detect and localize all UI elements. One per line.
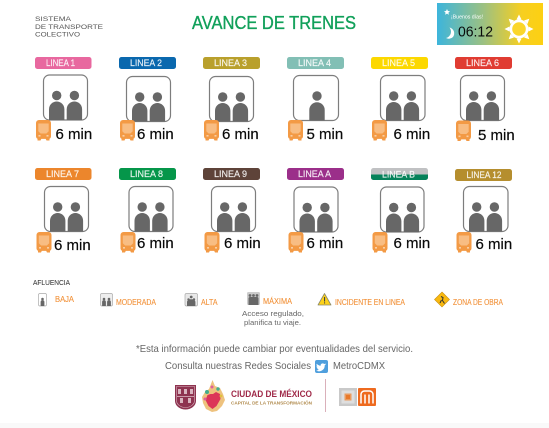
legend: maxima: MÁXIMA bbox=[263, 296, 292, 306]
legend heading: AFLUENCIA bbox=[33, 278, 70, 287]
panel: linea 1 bbox=[35, 57, 92, 143]
logo: metro bbox=[339, 388, 376, 406]
greeting card bbox=[437, 3, 543, 45]
organisation name: COLECTIVO bbox=[35, 32, 80, 38]
logo: shield bbox=[175, 385, 196, 410]
panel: linea 9 bbox=[203, 168, 261, 252]
panel: linea 2 bbox=[119, 57, 176, 143]
panel: linea 3: LINEA 3 bbox=[214, 58, 247, 68]
title: AVANCE DE TRENES bbox=[192, 13, 356, 33]
legend: maxima: Acceso regulado, bbox=[242, 309, 304, 318]
panel: linea 12: 6 min bbox=[476, 236, 512, 253]
panel: linea 4: 5 min bbox=[306, 126, 343, 143]
social media line bbox=[165, 360, 385, 373]
legend: baja bbox=[38, 294, 74, 306]
panel: linea 6: 5 min bbox=[478, 127, 515, 144]
panel: linea 3: 6 min bbox=[222, 126, 259, 143]
panel: linea 6 bbox=[455, 57, 515, 144]
greeting card: ¡Buenos días! bbox=[451, 14, 483, 20]
legend: zona de obra: ZONA DE OBRA bbox=[453, 297, 503, 307]
panel: linea A: LINEA A bbox=[298, 169, 331, 179]
panel: linea B: 6 min bbox=[394, 235, 430, 252]
panel: linea 3 bbox=[203, 57, 260, 143]
panel: linea 2: 6 min bbox=[137, 126, 174, 143]
legend: moderada bbox=[100, 294, 156, 307]
panel: linea B: LINEA B bbox=[382, 170, 415, 180]
panel: linea 8: LINEA 8 bbox=[130, 169, 163, 179]
legend: maxima: planifica tu viaje. bbox=[244, 318, 301, 327]
legend: moderada: MODERADA bbox=[116, 297, 156, 307]
legend: baja: BAJA bbox=[55, 294, 74, 304]
panel: linea 1: 6 min bbox=[56, 126, 92, 143]
logo: ciudad de mexico bbox=[231, 389, 313, 406]
panel: linea 8: 6 min bbox=[137, 235, 174, 252]
panel: linea 5: 6 min bbox=[394, 126, 430, 143]
organisation name bbox=[35, 16, 104, 38]
panel: linea 7: 6 min bbox=[54, 237, 91, 254]
panel: linea 4 bbox=[287, 57, 344, 143]
organisation name: SISTEMA bbox=[35, 16, 72, 23]
organisation name: DE TRANSPORTE bbox=[35, 24, 104, 31]
panel: linea A bbox=[287, 168, 344, 252]
panel: linea 5 bbox=[371, 57, 430, 143]
panel: linea 8 bbox=[119, 168, 176, 252]
legend: incidente en linea bbox=[318, 294, 405, 307]
panel: linea 2: LINEA 2 bbox=[130, 58, 162, 68]
panel: linea 7 bbox=[35, 168, 92, 254]
panel: linea 7: LINEA 7 bbox=[46, 169, 79, 179]
disclaimer: *Esta información puede cambiar por eventualidades del servicio. bbox=[136, 344, 413, 355]
panel: linea 12: LINEA 12 bbox=[466, 170, 502, 180]
logo: heart emblem bbox=[202, 380, 225, 412]
panel: linea 4: LINEA 4 bbox=[298, 58, 331, 68]
social media line: MetroCDMX bbox=[333, 361, 385, 372]
panel: linea B bbox=[371, 168, 430, 252]
panel: linea 5: LINEA 5 bbox=[382, 58, 415, 68]
legend: maxima bbox=[242, 292, 304, 327]
legend: alta bbox=[185, 294, 218, 307]
panel: linea 12 bbox=[455, 169, 512, 253]
panel: linea 9: LINEA 9 bbox=[214, 169, 247, 179]
divider bbox=[324, 379, 327, 412]
panel: linea A: 6 min bbox=[306, 235, 343, 252]
panel: linea 1: LINEA 1 bbox=[46, 58, 75, 68]
panel: linea 6: LINEA 6 bbox=[466, 58, 499, 68]
legend: zona de obra bbox=[434, 292, 503, 307]
panel: linea 9: 6 min bbox=[224, 235, 261, 252]
logo: ciudad de mexico: CAPITAL DE LA TRANSFORMACIÓN bbox=[231, 398, 313, 406]
greeting card: 06:12 bbox=[458, 24, 493, 40]
logo: ciudad de mexico: CIUDAD DE MÉXICO bbox=[231, 389, 312, 400]
legend: incidente en linea: INCIDENTE EN LINEA bbox=[335, 297, 405, 307]
legend: alta: ALTA bbox=[201, 297, 218, 307]
social media line: Consulta nuestras Redes Sociales bbox=[165, 361, 311, 372]
footer band bbox=[0, 423, 549, 428]
